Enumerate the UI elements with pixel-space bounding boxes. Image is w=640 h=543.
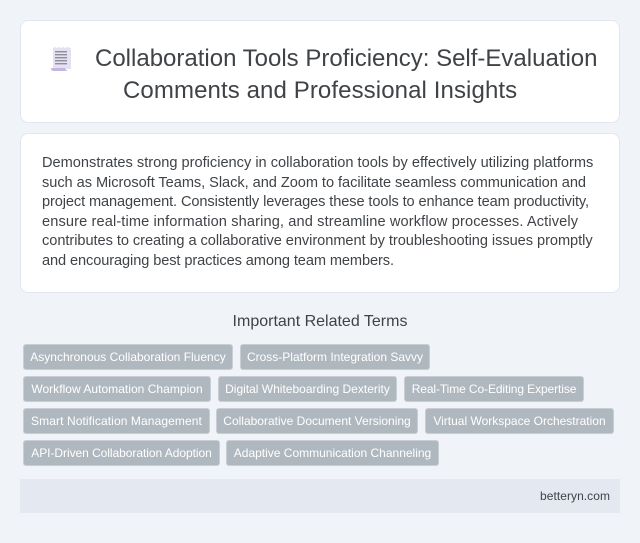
tag: Workflow Automation Champion: [31, 382, 203, 396]
tag: [425, 408, 614, 434]
panel: description card: [20, 133, 620, 293]
tag: [23, 408, 210, 434]
description text: such as Microsoft Teams, Slack, and Zoom to facilitate seamless communication and: [42, 175, 586, 191]
tag: Asynchronous Collaboration Fluency: [30, 350, 226, 364]
description text: ensure real-time information sharing, and streamline workflow processes. Actively: [42, 214, 578, 230]
description text: and encouraging best practices among team members.: [42, 253, 394, 269]
tag: [23, 344, 233, 370]
tag: [23, 376, 211, 402]
tag: Cross-Platform Integration Savvy: [247, 350, 423, 364]
description text: contributes to creating a collaborative environment by troubleshooting issues promptly: [42, 233, 593, 249]
panel: header card: [20, 20, 620, 123]
icon: document scroll: [51, 47, 71, 71]
tag: [216, 408, 418, 434]
tag: API-Driven Collaboration Adoption: [31, 446, 212, 460]
title: [95, 45, 598, 104]
tag: Adaptive Communication Channeling: [234, 446, 431, 460]
tag: Smart Notification Management: [31, 414, 202, 428]
footer source text: betteryn.com: [540, 489, 610, 503]
description text: Demonstrates strong proficiency in collaboration tools by effectively utilizing platforms: [42, 155, 593, 171]
heading: important related terms: Important Related Terms: [233, 313, 407, 330]
footer bar: [20, 479, 620, 513]
title: Collaboration Tools Proficiency: Self-Evaluation: [95, 45, 598, 72]
tag: Digital Whiteboarding Dexterity: [225, 382, 390, 396]
tag: Real-Time Co-Editing Expertise: [412, 382, 576, 396]
tag: Collaborative Document Versioning: [223, 414, 411, 428]
tag: Virtual Workspace Orchestration: [433, 414, 606, 428]
description text: project management. Consistently leverages these tools to enhance team productivity,: [42, 194, 589, 210]
tag: [240, 344, 430, 370]
tag: [218, 376, 397, 402]
tag: [226, 440, 439, 466]
tag: [404, 376, 584, 402]
title: Comments and Professional Insights: [123, 77, 517, 104]
tag list: [23, 344, 614, 466]
tag: [23, 440, 220, 466]
description text: [42, 155, 593, 269]
